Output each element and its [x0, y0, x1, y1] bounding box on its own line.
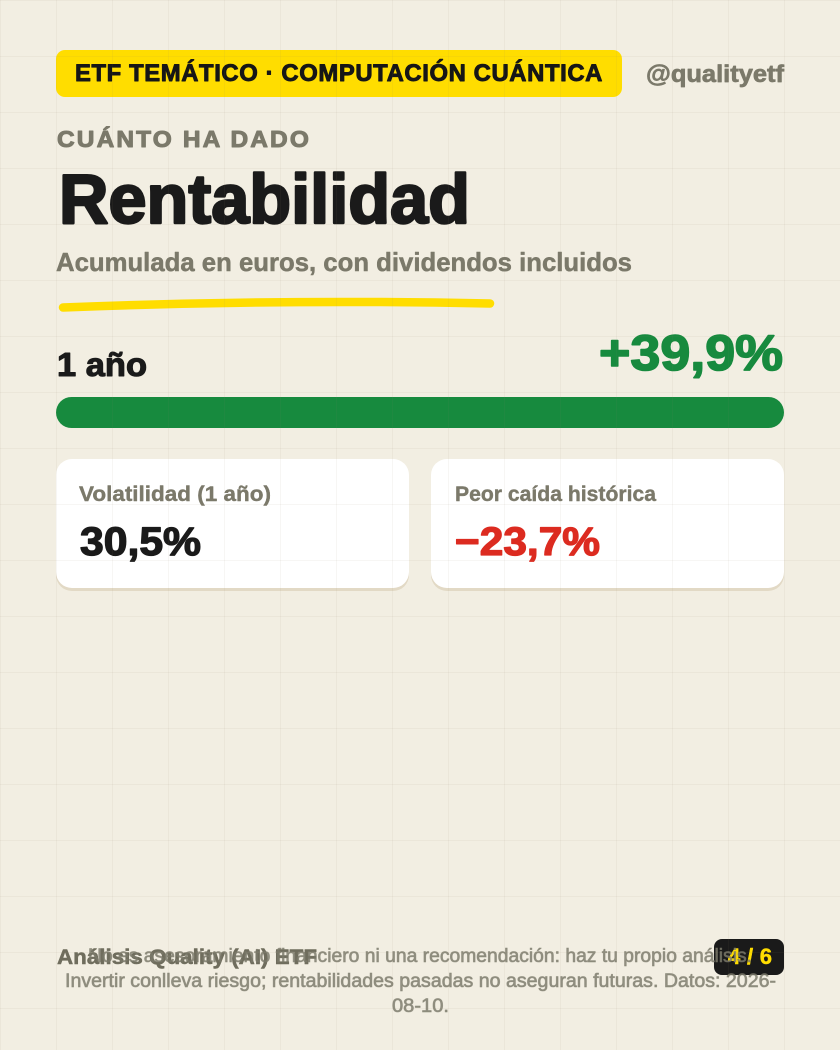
tag pill: ETF temático	[56, 50, 622, 97]
tag pill: ETF temático: ETF TEMÁTICO · COMPUTACIÓN CUÁNTICA	[75, 59, 603, 87]
footer brand: Análisis Quality (AI) ETF	[57, 946, 317, 969]
disclaimer: Invertir conlleva riesgo; rentabilidades pasadas no aseguran futuras. Datos: 2026-	[65, 971, 776, 992]
card: peor caída: Peor caída histórica	[455, 483, 656, 506]
subtitle: Acumulada en euros, con dividendos incluidos	[56, 247, 632, 277]
disclaimer: No es asesoramiento financiero ni una recomendación: haz tu propio análisis.	[88, 946, 752, 967]
handle: @qualityetf	[646, 61, 785, 88]
page badge: 4 / 6	[728, 944, 772, 969]
disclaimer: 08-10.	[392, 996, 449, 1017]
title: Rentabilidad	[59, 160, 470, 238]
card: peor caída	[431, 459, 784, 591]
eyebrow: CUÁNTO HA DADO	[57, 125, 311, 152]
period label: 1 año	[57, 346, 147, 383]
return bar	[56, 397, 784, 428]
card: volatilidad: 30,5%	[80, 520, 201, 564]
page badge	[714, 939, 784, 975]
card: peor caída: −23,7%	[455, 520, 600, 564]
card: volatilidad	[56, 459, 409, 591]
highlighter underline	[63, 302, 490, 308]
disclaimer	[65, 946, 776, 1017]
card: volatilidad: Volatilidad (1 año)	[79, 483, 271, 506]
return value: +39,9%	[599, 325, 783, 381]
